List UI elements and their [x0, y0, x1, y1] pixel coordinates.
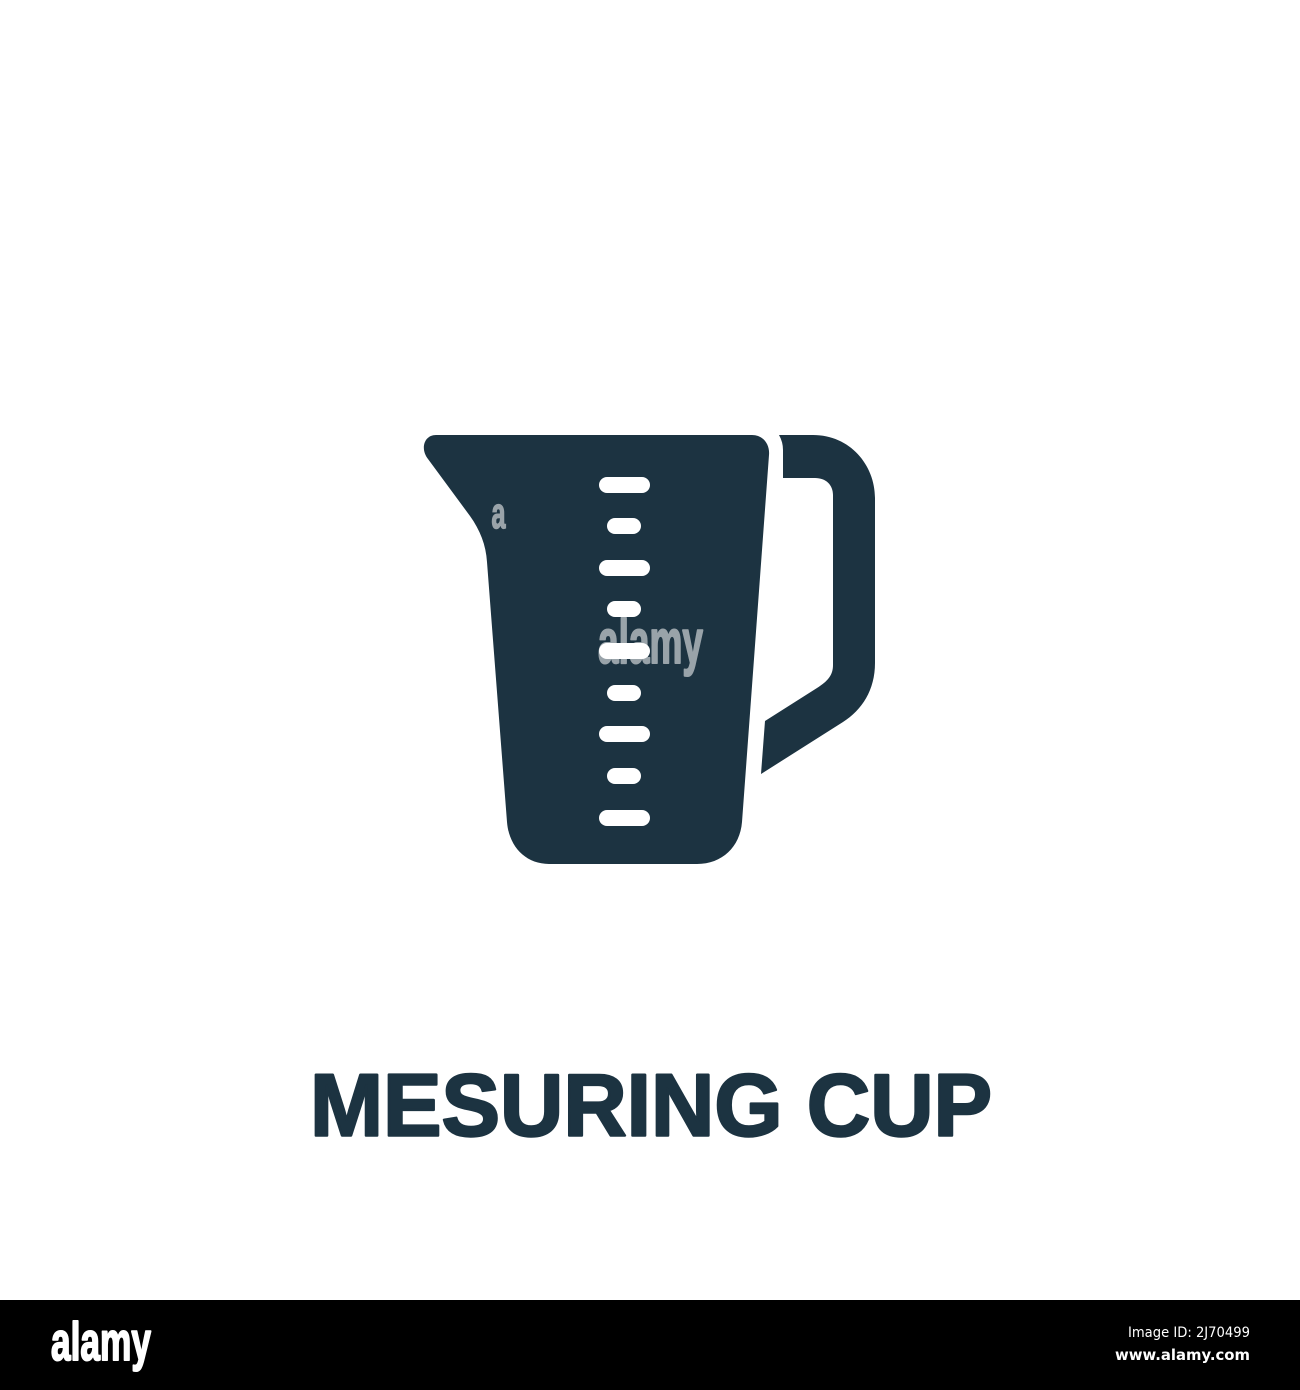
footer bar	[0, 1300, 1300, 1390]
website: www.alamy.com	[1115, 1346, 1250, 1364]
icon: measuring cup	[424, 435, 875, 864]
measuring scale ticks	[599, 477, 650, 826]
title: MESURING CUP	[310, 1056, 992, 1154]
cup body	[424, 435, 769, 864]
watermark: alamy center: alamy	[598, 608, 703, 677]
footer logo: alamy	[51, 1312, 151, 1372]
cup handle	[761, 435, 875, 774]
image id: Image ID: 2J70499	[1128, 1325, 1250, 1341]
watermark: small a: a	[492, 489, 506, 538]
